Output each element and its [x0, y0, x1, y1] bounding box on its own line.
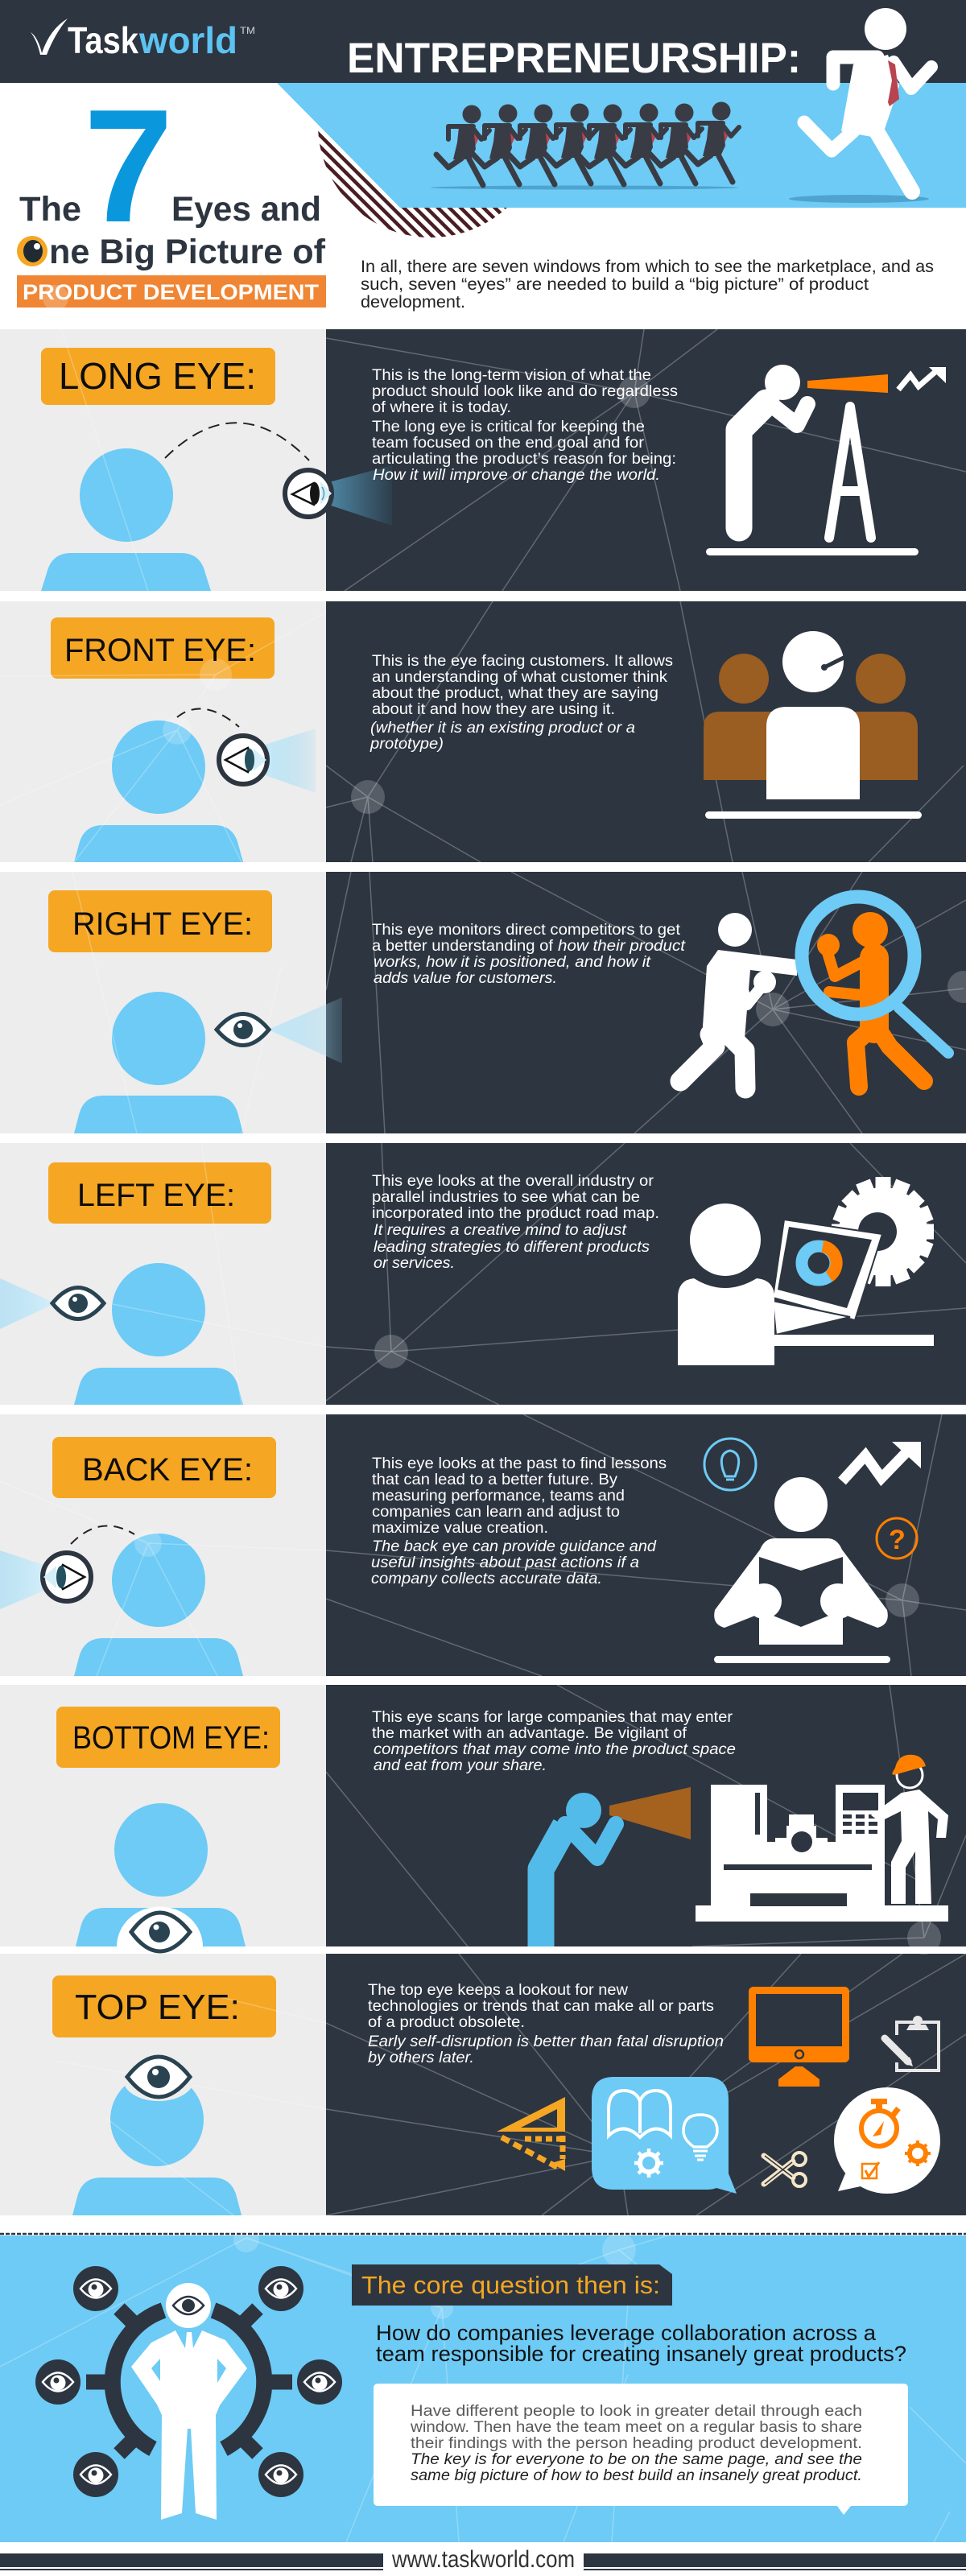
hatched circle — [318, 12, 543, 237]
long eye: eye on arc with beam — [165, 423, 392, 526]
icon: person with telescope — [706, 365, 946, 555]
long eye: label and text: The long eye is critical for keeping the — [372, 418, 645, 436]
back eye: label and text: This eye looks at the past to find lessons — [372, 1455, 667, 1472]
long eye: label and text — [59, 355, 678, 484]
top eye: label and text: The top eye keeps a lookout for new — [368, 1981, 629, 1999]
back eye: label and text: company collects accurate data. — [371, 1570, 602, 1587]
bottom eye: label and text: the market with an advantage. Be vigilant of — [372, 1724, 687, 1742]
long eye: label and text: LONG EYE: — [59, 355, 256, 397]
top eye: label and text: TOP EYE: — [75, 1988, 240, 2027]
label box: back eye — [52, 1437, 276, 1498]
back eye: label and text: BACK EYE: — [82, 1452, 253, 1488]
icon: orange monitor — [749, 1987, 849, 2087]
label box: left eye — [48, 1162, 271, 1224]
left eye: label and text: leading strategies to different products — [374, 1238, 650, 1256]
silhouette: back eye head and shoulders — [74, 1534, 243, 1676]
top eye: label and text: technologies or trends that can make all or parts — [368, 1997, 714, 2015]
left eye: label and text: incorporated into the product road map. — [372, 1204, 659, 1222]
long eye: label and text: of where it is today. — [372, 398, 511, 416]
right eye: label and text: works, how it is positioned, and how it — [374, 953, 652, 971]
left eye: label and text: It requires a creative mind to adjust — [374, 1221, 628, 1239]
right eye: eye with beam — [217, 997, 342, 1063]
icon: person inspecting competitor with magnifier — [680, 897, 948, 1088]
right eye: label and text: This eye monitors direct competitors to get — [372, 921, 681, 939]
heading: the 7 eyes and one big picture of: The — [19, 190, 81, 229]
back eye: label and text: that can lead to a better future. By — [372, 1471, 617, 1488]
callout: white speech box: window. Then have the team meet on a regular basis to share — [410, 2419, 862, 2436]
back eye: eye on arc with beam — [0, 1525, 134, 1609]
back eye: label and text: maximize value creation. — [372, 1519, 548, 1537]
panel: core question background — [0, 2235, 966, 2542]
icon: leader surrounded by six eyes — [35, 2266, 342, 2520]
icon: clipboard and pencil — [885, 2016, 939, 2070]
long eye: label and text: product should look like and do regardless — [372, 382, 678, 400]
icon: white bubble with stopwatch, gear and checkbox — [834, 2087, 940, 2194]
icon: person at laptop with gear — [678, 1177, 934, 1365]
heading: the 7 eyes and one big picture of — [17, 76, 326, 304]
icon: blue speech bubble with book, bulb and gear — [592, 2077, 737, 2194]
icon: set square — [497, 2097, 565, 2171]
left eye: label and text: LEFT EYE: — [77, 1178, 235, 1213]
panel: top eye background — [0, 1954, 966, 2215]
intro text: such, seven “eyes” are needed to build a “big picture” of product — [361, 275, 869, 294]
left eye: label and text: parallel industries to see what can be — [372, 1188, 640, 1206]
icon: lead runner — [789, 8, 931, 203]
heading: the 7 eyes and one big picture of: PRODUCT DEVELOPMENT — [23, 280, 320, 304]
long eye: label and text: team focused on the end goal and for — [372, 434, 645, 452]
silhouette: bottom eye head and shoulders — [76, 1803, 246, 1946]
panel: left eye background — [0, 1143, 966, 1405]
front eye: label and text: prototype) — [369, 735, 444, 753]
intro text: development. — [361, 293, 465, 312]
bottom eye: label and text: and eat from your share. — [374, 1757, 547, 1774]
front eye: label and text — [64, 633, 673, 753]
top eye: label and text — [75, 1981, 724, 2066]
bottom eye: eye on chest — [117, 1907, 203, 1951]
right eye: label and text — [72, 906, 687, 987]
bottom eye: label and text — [72, 1708, 736, 1774]
back eye: label and text — [82, 1452, 667, 1587]
silhouette: right eye head and shoulders — [74, 992, 243, 1133]
top eye: eye on head — [123, 2057, 194, 2101]
heading: the 7 eyes and one big picture of: 7 — [84, 76, 173, 256]
panel: right eye background — [0, 872, 966, 1133]
title: entrepreneurship: ENTREPRENEURSHIP: — [347, 35, 801, 82]
panel: back eye background — [0, 1414, 966, 1676]
back eye: label and text: measuring performance, teams and — [372, 1487, 625, 1505]
front eye: label and text: FRONT EYE: — [64, 633, 256, 668]
heading: the 7 eyes and one big picture of: ne Big Picture of — [49, 233, 326, 271]
front eye: label and text: about it and how they are using it. — [372, 700, 615, 718]
icon: row of eight runners — [431, 101, 739, 190]
left eye: eye with beam — [0, 1278, 104, 1329]
silhouette: left eye head and shoulders — [74, 1263, 243, 1405]
back eye: label and text: The back eye can provide guidance and — [372, 1538, 657, 1555]
bottom eye: label and text: This eye scans for large companies that may enter — [372, 1708, 733, 1726]
long eye: label and text: articulating the product’s reason for being: — [372, 450, 676, 468]
logo: Taskworld — [31, 19, 255, 61]
callout: white speech box: Have different people to look in greater detail through each — [411, 2403, 862, 2420]
intro text: In all, there are seven windows from which to see the marketplace, and as — [361, 258, 934, 276]
silhouette: top eye head and shoulders — [72, 2073, 242, 2215]
top eye: label and text: Early self-disruption is better than fatal disruption — [368, 2033, 724, 2050]
callout: core question label — [352, 2264, 672, 2306]
left eye: label and text: This eye looks at the overall industry or — [372, 1172, 654, 1190]
silhouette: front eye head and shoulders — [74, 720, 243, 862]
front eye: eye on arc with beam — [177, 708, 316, 793]
question text: team responsible for creating insanely great products? — [376, 2342, 906, 2366]
long eye: label and text: How it will improve or change the world. — [373, 466, 660, 484]
right eye: label and text: RIGHT EYE: — [72, 906, 253, 942]
intro text — [361, 258, 934, 312]
front eye: label and text: This is the eye facing customers. It allows — [372, 652, 673, 670]
top eye: label and text: of a product obsolete. — [368, 2013, 525, 2031]
back eye: label and text: useful insights about past actions if a — [371, 1554, 639, 1571]
question text — [376, 2321, 906, 2366]
label box: front eye — [51, 617, 275, 679]
right eye: label and text: a better understanding of — [372, 937, 554, 955]
front eye: label and text: (whether it is an existing product or a — [370, 719, 635, 737]
icon: person scanning factory machine — [541, 1755, 948, 1946]
panel: long eye background — [0, 329, 966, 591]
panel: bottom eye background — [0, 1685, 966, 1946]
logo: Taskworld: TM — [240, 25, 255, 36]
heading: the 7 eyes and one big picture of: Eyes and — [171, 190, 321, 229]
question text: How do companies leverage collaboration across a — [376, 2321, 877, 2345]
back eye: label and text: companies can learn and adjust to — [372, 1503, 620, 1521]
left eye: label and text: or services. — [374, 1254, 455, 1272]
callout: white speech box: The key is for everyone to be on the same page, and see the — [411, 2451, 862, 2468]
blue banner — [277, 83, 966, 208]
right eye: label and text: adds value for customers. — [374, 969, 557, 987]
bottom eye: label and text: competitors that may come into the product space — [374, 1740, 736, 1758]
panel: front eye background — [0, 601, 966, 862]
label box: bottom eye — [56, 1707, 280, 1768]
dashed divider — [0, 2233, 966, 2235]
left eye: label and text — [77, 1172, 659, 1272]
callout: white speech box: same big picture of how to best build an insanely great product. — [411, 2467, 862, 2484]
label box: right eye — [48, 890, 272, 952]
label box: long eye — [41, 348, 275, 405]
label box: top eye — [52, 1975, 276, 2037]
right eye: label and text: how their product — [558, 937, 687, 955]
footer bars and URL: www.taskworld.com — [391, 2546, 575, 2573]
bottom eye: label and text: BOTTOM EYE: — [72, 1720, 270, 1756]
long eye: label and text: This is the long-term vision of what the — [372, 366, 651, 384]
callout: core question label: The core question then is: — [361, 2271, 660, 2299]
icon: person reading book with ideas — [704, 1439, 921, 1663]
callout: white speech box: their findings with the person heading product development. — [411, 2435, 862, 2452]
callout: white speech box — [374, 2384, 908, 2515]
silhouette: long eye head and shoulders — [41, 448, 211, 591]
front eye: label and text: an understanding of what customer think — [372, 668, 667, 686]
icon: customers around presenter — [704, 631, 922, 819]
icon: person reading book with ideas: ? — [889, 1525, 906, 1555]
icon: scissors — [764, 2153, 806, 2186]
logo: Taskworld: Task — [68, 19, 138, 61]
footer bars and URL — [0, 2546, 966, 2573]
top eye: label and text: by others later. — [368, 2049, 474, 2066]
header band — [0, 0, 966, 83]
orange product development box — [17, 275, 326, 308]
logo: Taskworld: world — [138, 19, 237, 61]
front eye: label and text: about the product, what they are saying — [372, 684, 658, 702]
